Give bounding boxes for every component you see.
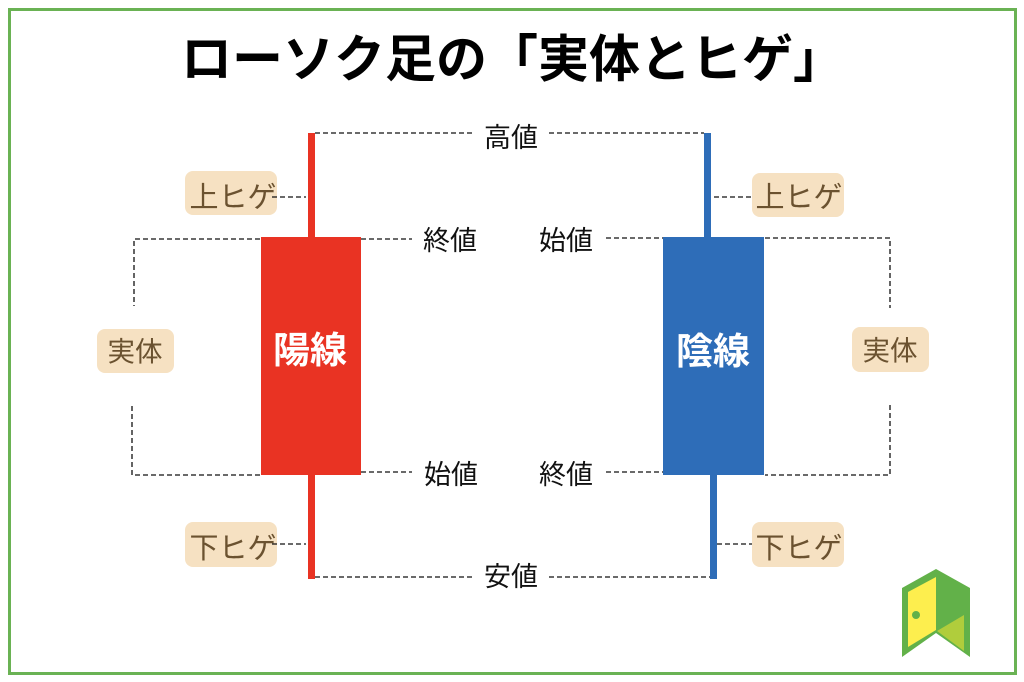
label: bearish close: 終値 (539, 460, 593, 490)
tag: bearish upper wick: 上ヒゲ (755, 182, 843, 214)
tag: bullish upper wick: 上ヒゲ (189, 182, 277, 214)
bullish candlestick (261, 133, 361, 579)
label: bullish open: 始値 (424, 460, 478, 490)
tag: bearish body: 実体 (862, 335, 918, 366)
bearish candlestick (663, 133, 764, 579)
label: 陽線: 陽線 (273, 330, 347, 371)
tag: bullish upper wick (185, 171, 277, 215)
label: bullish close: 終値 (423, 226, 477, 256)
tag: bearish upper wick (752, 173, 844, 217)
tag: bullish lower wick (185, 522, 277, 567)
label: high price: 高値 (484, 123, 538, 153)
label: low price: 安値 (484, 562, 538, 592)
label: 陰線: 陰線 (676, 331, 750, 372)
label: bearish open: 始値 (539, 226, 593, 256)
tag: bearish lower wick: 下ヒゲ (755, 533, 843, 565)
tag: bullish lower wick: 下ヒゲ (189, 533, 277, 565)
tag: bullish body (97, 329, 174, 373)
tag: bearish body (852, 327, 929, 372)
title: ローソク足の「実体とヒゲ」 (181, 31, 844, 88)
icon: green door logo (902, 569, 970, 657)
tag: bearish lower wick (752, 522, 844, 567)
tag: bullish body: 実体 (108, 336, 162, 367)
